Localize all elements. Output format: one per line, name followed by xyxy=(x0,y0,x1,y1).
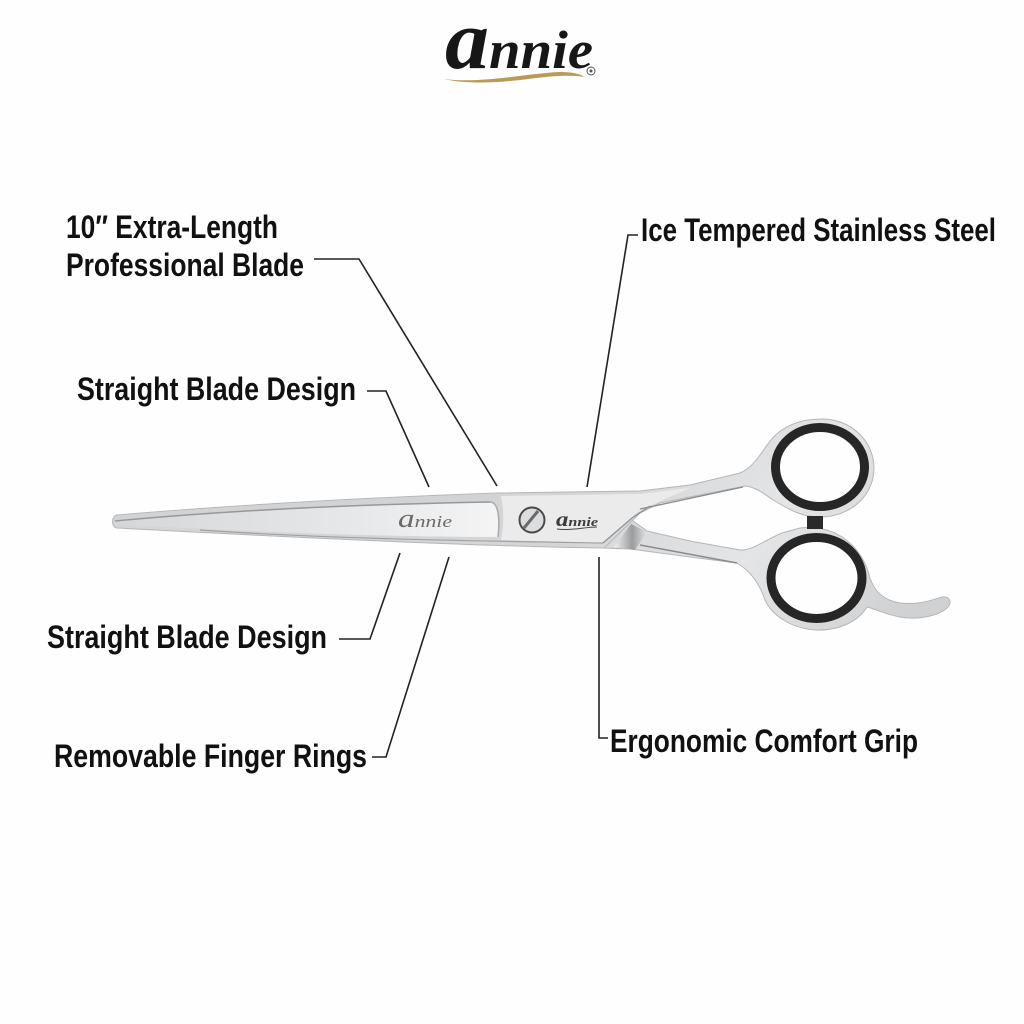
finger ring upper xyxy=(776,428,864,506)
blade ridge xyxy=(115,502,490,521)
blade engraving: annie xyxy=(398,504,453,533)
blade hollow xyxy=(115,502,499,537)
leader: extra-length blade xyxy=(314,259,497,486)
leader: finger rings xyxy=(372,557,449,757)
label: straight blade upper: Straight Blade Design xyxy=(77,371,356,407)
shank highlight xyxy=(603,506,650,543)
finger ring lower xyxy=(771,538,862,618)
upper handle and blade xyxy=(112,419,874,548)
label: comfort grip: Ergonomic Comfort Grip xyxy=(610,723,918,759)
blade hollow edge xyxy=(490,502,499,537)
pivot screw xyxy=(520,508,544,532)
leader: stainless steel xyxy=(587,235,638,487)
ring connector xyxy=(807,516,823,529)
blade top band xyxy=(115,494,499,521)
scissors illustration xyxy=(112,419,950,630)
leader: straight blade lower xyxy=(339,553,400,639)
shank face xyxy=(501,488,690,543)
label: extra-length blade: Professional Blade xyxy=(66,247,304,283)
label: extra-length blade xyxy=(66,209,304,283)
shank engraving: annie xyxy=(556,509,598,531)
label: straight blade lower: Straight Blade Design xyxy=(47,619,327,655)
lower handle and tang xyxy=(604,520,950,630)
label: finger rings: Removable Finger Rings xyxy=(54,738,367,774)
label: extra-length blade: 10″ Extra-Length xyxy=(66,209,278,245)
leader: comfort grip xyxy=(599,557,608,738)
leader: straight blade upper xyxy=(367,391,429,487)
